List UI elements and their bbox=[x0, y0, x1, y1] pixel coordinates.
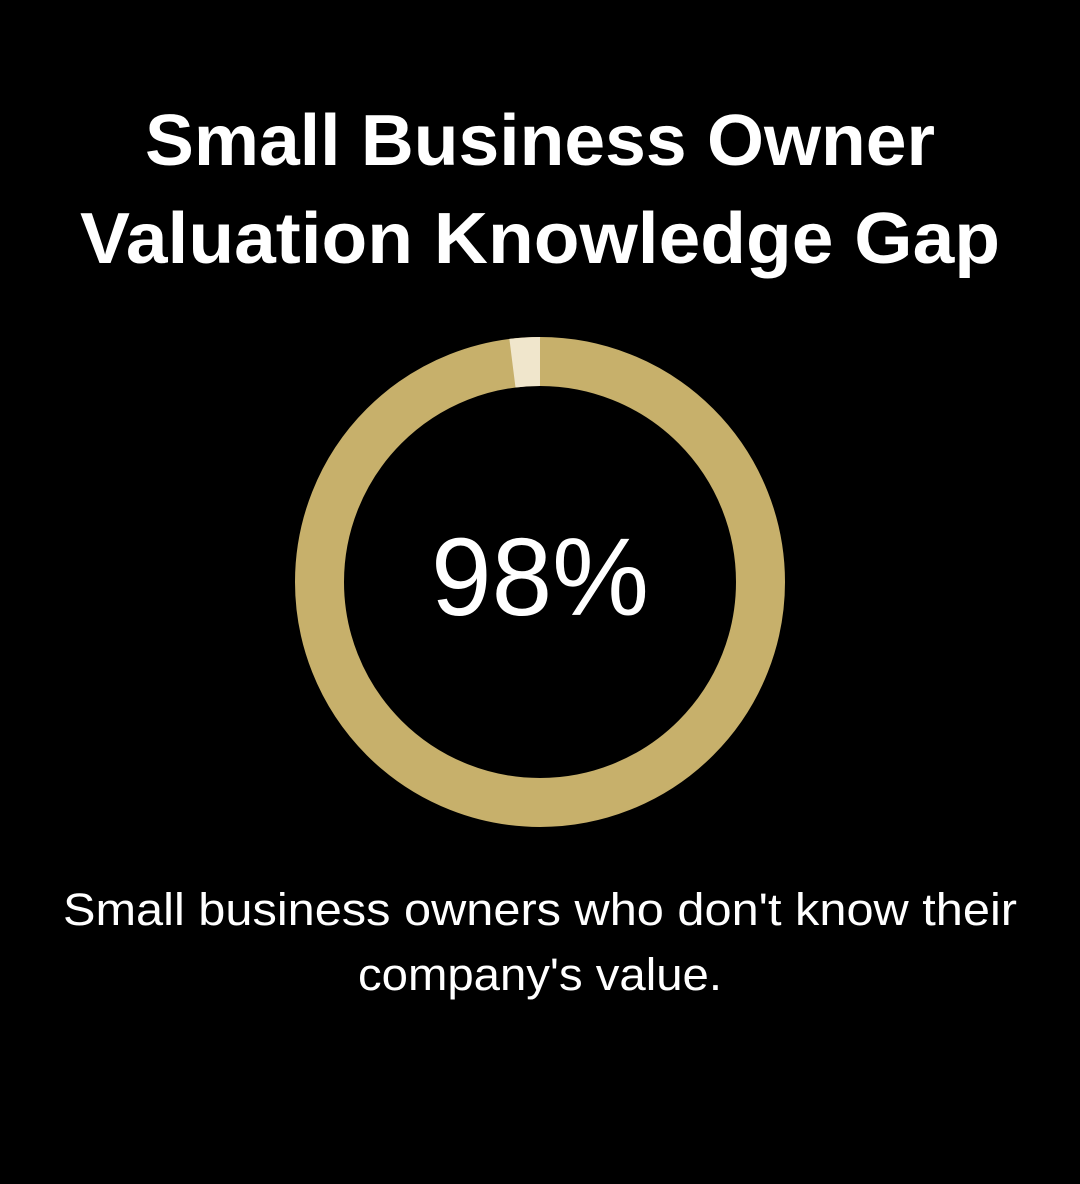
title: Small Business Owner bbox=[145, 101, 935, 181]
caption bbox=[63, 884, 1017, 1000]
caption: company's value. bbox=[358, 949, 722, 1000]
donut chart: 98% bbox=[320, 362, 760, 802]
center value: 98% bbox=[431, 516, 649, 639]
title: Valuation Knowledge Gap bbox=[80, 199, 1000, 279]
caption: Small business owners who don't know their bbox=[63, 884, 1017, 935]
title bbox=[80, 101, 1000, 279]
